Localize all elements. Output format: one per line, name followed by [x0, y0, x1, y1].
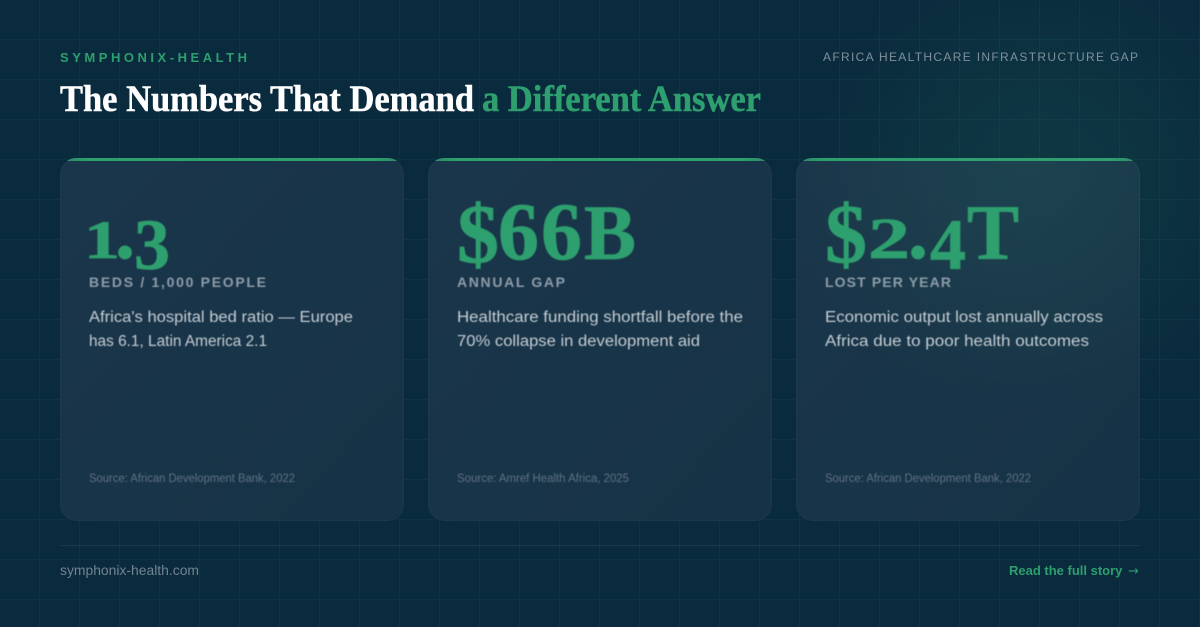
description: has 6.1, Latin America 2.1 [89, 333, 267, 350]
panel: annual gap [428, 158, 772, 521]
panel: hospital beds [60, 158, 404, 521]
description: Healthcare funding shortfall before the [457, 309, 743, 326]
stat value: . [115, 188, 135, 276]
title: The Numbers That Demand [60, 79, 474, 120]
description [89, 309, 353, 350]
stat value: 6 [498, 186, 539, 277]
stat value: . [908, 188, 928, 276]
description [457, 309, 743, 350]
description [825, 309, 1103, 350]
description: 70% collapse in development aid [457, 333, 700, 350]
source: Source: Amref Health Africa, 2025 [457, 473, 629, 485]
stat label: ANNUAL GAP [457, 274, 565, 290]
stat value: 2 [868, 206, 910, 271]
stat value: T [967, 189, 1019, 276]
description: Africa's hospital bed ratio — Europe [89, 309, 353, 326]
panel: economic loss [796, 158, 1140, 521]
source: Source: African Development Bank, 2022 [89, 473, 295, 485]
stat value: 6 [541, 186, 582, 277]
stat value: 4 [930, 205, 966, 285]
stat value: $ [825, 188, 867, 281]
footer website: symphonix-health.com [60, 563, 199, 578]
title [60, 79, 761, 120]
stat label: LOST PER YEAR [825, 274, 951, 290]
brand eyebrow: SYMPHONIX-HEALTH [60, 50, 247, 65]
stat value: 3 [134, 205, 170, 285]
description: Economic output lost annually across [825, 309, 1103, 326]
stat value: $ [457, 188, 499, 281]
header topic label: AFRICA HEALTHCARE INFRASTRUCTURE GAP [823, 50, 1138, 64]
title: a Different Answer [482, 79, 761, 120]
footer call to action: → [1128, 564, 1139, 579]
source: Source: African Development Bank, 2022 [825, 473, 1031, 485]
stat value: B [584, 189, 636, 276]
footer call to action: Read the full story [1009, 563, 1126, 578]
stat value: 1 [84, 210, 120, 270]
stat label: BEDS / 1,000 PEOPLE [89, 274, 266, 290]
description: Africa due to poor health outcomes [825, 333, 1089, 350]
